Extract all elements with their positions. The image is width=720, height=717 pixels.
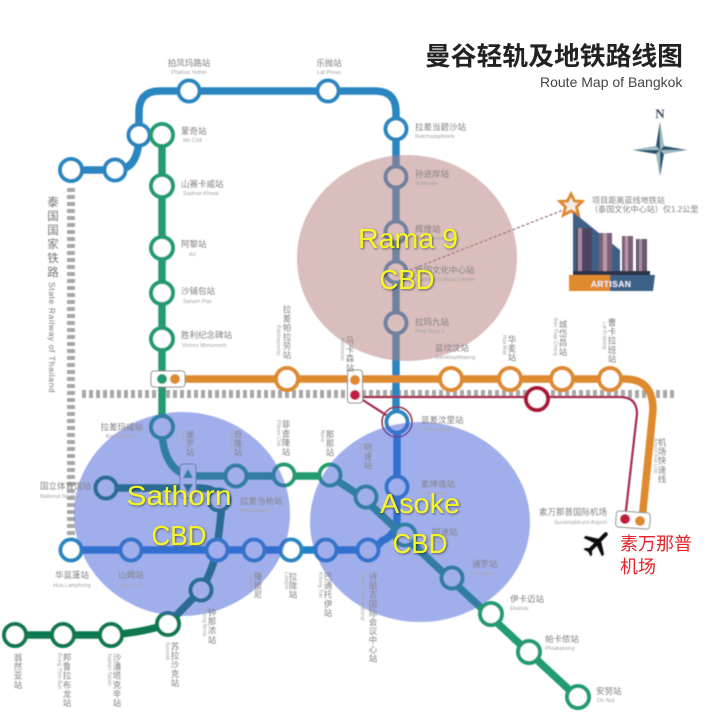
heading: station labels: 暹罗站	[185, 429, 195, 458]
heading: station labels: Saphan Khwai	[183, 191, 218, 197]
line: dashed link to Artisan	[410, 207, 571, 270]
heading: station labels: Asok	[357, 443, 363, 455]
heading: station labels: Makkasan	[339, 338, 345, 361]
text block: State Railway of Thailand	[46, 195, 59, 393]
heading: station labels: Phetchaburi	[421, 427, 450, 433]
heading: station labels: 孙进岸站	[415, 169, 450, 179]
text block: State Railway of Thailand: State Railway of Thailand	[47, 282, 57, 393]
label: Sathorn CBD: Sathorn	[126, 480, 232, 511]
heading: station labels: Suvarnabhumi Airport	[554, 520, 607, 526]
heading: station labels: Nana	[319, 430, 325, 442]
station: red ring	[526, 388, 548, 410]
heading: station labels: Ratchadaphisek	[415, 134, 455, 140]
icon: Artisan building: ARTISAN	[591, 279, 631, 289]
label: Asoke CBD: CBD	[392, 528, 448, 559]
line: red	[355, 395, 637, 519]
label: airport: 机场	[620, 557, 656, 577]
callout: distance to metro	[590, 195, 698, 214]
heading: station labels: 阿黎站	[181, 239, 207, 249]
heading: station labels: Lumpini	[283, 572, 289, 590]
heading: station labels: 国立体育馆站	[40, 481, 92, 491]
heading: station labels: Sukhumvit	[421, 491, 447, 497]
heading: station labels: Mo Chit	[183, 138, 202, 144]
heading: station labels: 阿速站	[363, 443, 373, 471]
subtitle: Route Map of Bangkok	[540, 74, 683, 90]
heading: station labels: Hua Lamphong	[53, 583, 91, 589]
label: Sathorn CBD	[126, 480, 232, 551]
line: orange airport link	[175, 379, 653, 520]
heading: station labels: 巴通托伊站	[323, 572, 333, 618]
heading: station labels: 曹卡拉班站	[607, 317, 617, 364]
heading: station labels: Phra Ram 9	[415, 329, 444, 335]
circle: Asoke CBD	[310, 422, 530, 622]
heading: station labels: 华麦站	[507, 334, 517, 363]
icon: star	[560, 194, 582, 215]
heading: station labels: Ban Thap Chang	[552, 318, 558, 356]
title: 曼谷轻轨及地铁路线图	[425, 42, 683, 71]
label: airport	[620, 534, 692, 577]
heading: station labels: 城岱昌站	[558, 320, 568, 357]
heading: station labels: 安努站	[596, 686, 622, 696]
heading: station labels: Sutthisan	[415, 181, 438, 187]
interchange box: Suvarnabhumi	[615, 511, 651, 529]
icon: compass	[633, 106, 687, 176]
heading: station labels: 马卡森站	[345, 336, 355, 373]
heading: station labels: 山赛卡威站	[181, 179, 224, 189]
heading: station labels: 沙铺包站	[181, 286, 216, 296]
heading: station labels: 奇隆站	[233, 429, 243, 458]
stations: green	[151, 124, 589, 708]
heading: station labels: 蒙奇站	[181, 126, 207, 136]
heading: station labels: Ramkhamhaeng	[435, 355, 475, 361]
line: blue south	[71, 422, 397, 550]
heading: station labels: Ekamai	[510, 606, 528, 612]
heading: station labels: 帕卡侬站	[545, 634, 580, 644]
heading: station labels: Sanam Pao	[183, 299, 212, 305]
label: Rama 9 CBD	[358, 223, 458, 295]
heading: station labels: Phahon Yothin	[171, 70, 207, 76]
heading: station labels: Ratchaprarop	[275, 325, 281, 356]
icon: plane	[578, 524, 616, 562]
banner	[569, 275, 613, 291]
heading: station labels: Ari	[189, 252, 196, 258]
heading: station labels: 苏拉沙克站	[170, 641, 180, 688]
heading: station labels: On Nut	[597, 698, 615, 704]
heading: station labels: Asok	[432, 539, 444, 545]
heading: station labels: Sam Yan	[120, 583, 142, 589]
heading: station labels: Surasak	[164, 642, 170, 661]
heading: station labels: 素坤逸站	[421, 479, 456, 489]
heading: station labels: Queen Sirikit National	[359, 572, 365, 620]
heading: station labels: Hua Mak	[501, 335, 507, 356]
label: Rama 9 CBD: CBD	[380, 264, 434, 295]
heading: station labels: 通罗站	[472, 559, 498, 569]
heading: station labels: Phrakanong	[545, 646, 575, 652]
stations: blue	[60, 80, 408, 560]
heading: station labels: Ratchathewi	[106, 434, 136, 440]
heading: station labels: Thailand Cultural Center	[415, 277, 475, 283]
heading: station labels: 泰国文化中心站	[415, 265, 475, 275]
heading: station labels: 素万那普国际机场	[539, 507, 607, 517]
heading: station labels: Lat Phrao	[317, 70, 341, 76]
heading: station labels: Airport Rail Link	[652, 438, 658, 474]
heading: station labels: 拉差玛威站	[100, 422, 143, 432]
heading: station labels: 隆披尼	[253, 571, 263, 600]
heading: station labels: 那那站	[325, 430, 335, 458]
railway: State Railway dashed tracks	[71, 188, 676, 538]
heading: station labels: 沙潘塔克辛站	[112, 653, 122, 708]
heading: station labels: 拍凤玛路站	[168, 58, 211, 68]
heading: station labels: 阿速站	[432, 527, 458, 537]
heading: station labels: 乐抛站	[316, 58, 342, 68]
label: airport: 素万那普	[620, 534, 692, 554]
heading: station labels: 山姆站	[118, 570, 144, 580]
heading: station labels: 拉差当枪站	[240, 496, 283, 506]
heading: station labels: Siam	[179, 430, 185, 441]
label: Asoke CBD: Asoke	[380, 488, 460, 519]
circle: Sathorn CBD	[74, 412, 290, 616]
heading: station labels: 伊卡迈站	[510, 594, 545, 604]
heading: station labels: 菲查隆站	[281, 419, 291, 457]
heading: station labels: National Stadium	[40, 494, 82, 500]
heading: station labels: 蓝差汶里站	[421, 415, 464, 425]
label: Asoke CBD	[380, 488, 460, 559]
heading: station labels: Saphan Taksin	[106, 653, 112, 686]
heading: station labels: 机场快速线	[657, 437, 667, 484]
heading: station labels: Lumphini	[247, 572, 253, 592]
heading: station labels: Chit Lom	[228, 430, 234, 450]
stations: orange	[276, 368, 621, 390]
interchange ring: Phetchaburi	[382, 407, 412, 437]
icon: Artisan building	[560, 194, 655, 291]
heading: station labels: 华蓝蓬站	[55, 570, 89, 580]
circle: Rama 9 CBD	[297, 155, 517, 361]
heading: station labels: 辉煌站	[415, 224, 441, 234]
line: blue north	[71, 91, 396, 430]
heading: station labels: Khlong Toei	[317, 572, 323, 598]
heading: station labels: 拉差帕拉劳站	[282, 304, 292, 360]
heading: station labels: 邦鲁拉布龙站	[62, 652, 72, 708]
callout: distance to metro: 项目距离蓝线地铁站	[592, 195, 665, 205]
heading: station labels: 拉玛九站	[415, 317, 450, 327]
callout: distance to metro: （泰国文化中心站）仅1.2公里	[590, 204, 698, 214]
label: Sathorn CBD: CBD	[152, 520, 206, 551]
interchange box: Siam north	[151, 371, 185, 387]
heading: station labels: 诗丽吉国际会议中心站	[368, 571, 378, 663]
heading: station labels: 胜利纪念碑站	[181, 330, 233, 340]
line: green Sukhumvit	[162, 135, 578, 698]
heading: station labels: Victory Monument	[182, 343, 227, 349]
line: dark green Silom	[15, 488, 222, 635]
heading: station labels: Ratchadamri	[240, 508, 271, 514]
panel: CBD circles	[74, 155, 530, 622]
text block: State Railway of Thailand: 泰国国家铁路	[46, 195, 59, 280]
heading: station labels: Huai Khwang	[415, 236, 448, 242]
icon: compass: N	[655, 106, 665, 121]
interchange box: Siam	[180, 464, 196, 498]
interchange box: Makkasan	[348, 370, 362, 403]
heading: station labels: Lat Krabang	[601, 322, 607, 349]
heading: station labels: Thonglor	[472, 571, 494, 577]
heading: station labels: Krung Thon Buri	[56, 653, 62, 689]
heading: station labels: Chong Nonsi	[201, 608, 207, 637]
heading: station labels: 翁然亚站	[13, 652, 23, 690]
heading: station labels: 拉陇站	[288, 571, 298, 600]
heading: station labels: Phloen Chit	[275, 420, 281, 446]
heading: station labels: 钟那浓站	[207, 607, 217, 645]
heading: station labels: 蓝坎汶站	[435, 343, 470, 353]
label: Rama 9 CBD: Rama 9	[358, 223, 458, 254]
stations: dark green	[4, 478, 230, 646]
heading: station labels: 拉差当碧沙站	[415, 122, 467, 132]
